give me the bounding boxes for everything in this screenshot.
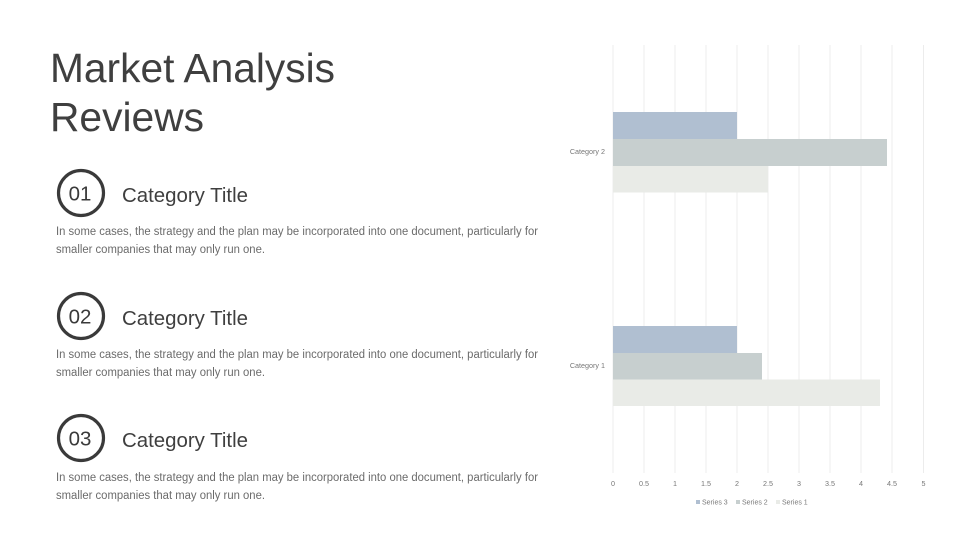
text block: description 03: In some cases, the strategy and the plan may be incorporated into one document, particularly for	[56, 472, 538, 484]
text block: description 02	[56, 349, 538, 379]
value axis labels	[611, 479, 926, 488]
category axis labels: Category 2	[570, 147, 605, 156]
value axis labels: 1.5	[701, 479, 711, 488]
text block: description 03	[56, 472, 538, 502]
text block: description 03: smaller companies that may only run one.	[56, 490, 265, 502]
value axis labels: 4.5	[887, 479, 897, 488]
chart legend: Series 2	[742, 500, 768, 506]
text block: description 01: smaller companies that may only run one.	[56, 244, 265, 256]
heading: category title 03: Category Title	[122, 430, 248, 452]
text block: description 02: In some cases, the strategy and the plan may be incorporated into one document, particularly for	[56, 349, 538, 361]
title: Market Analysis	[50, 45, 335, 91]
icon: number badge 03	[58, 416, 104, 460]
icon: number badge 01: 01	[69, 182, 91, 206]
icon: number badge 01	[58, 170, 104, 216]
bar chart	[570, 45, 926, 506]
value axis labels: 4	[859, 479, 863, 488]
bars: category 1	[613, 326, 880, 406]
value axis labels: 0	[611, 479, 615, 488]
text block: description 01: In some cases, the strategy and the plan may be incorporated into one document, particularly for	[56, 226, 538, 238]
text block: description 02: smaller companies that may only run one.	[56, 367, 265, 379]
value axis labels: 1	[673, 479, 677, 488]
title: Reviews	[50, 94, 204, 140]
category axis labels	[570, 147, 605, 370]
title	[50, 45, 335, 140]
value axis labels: 5	[922, 479, 926, 488]
panel: item 01	[56, 170, 538, 256]
chart legend	[696, 500, 808, 506]
category axis labels: Category 1	[570, 361, 605, 370]
value axis labels: 3	[797, 479, 801, 488]
heading: category title 01: Category Title	[122, 185, 248, 207]
icon: number badge 02	[58, 294, 104, 338]
icon: number badge 03: 03	[69, 428, 91, 450]
value axis labels: 2.5	[763, 479, 773, 488]
value axis labels: 0.5	[639, 479, 649, 488]
chart legend: Series 1	[782, 500, 808, 506]
chart legend: Series 3	[702, 500, 728, 506]
value axis labels: 3.5	[825, 479, 835, 488]
text block: description 01	[56, 226, 538, 256]
heading: category title 02: Category Title	[122, 308, 248, 330]
panel: item 03	[56, 416, 538, 502]
panel: item 02	[56, 294, 538, 379]
value axis labels: 2	[735, 479, 739, 488]
bars: category 2	[613, 112, 887, 192]
icon: number badge 02: 02	[69, 306, 91, 328]
